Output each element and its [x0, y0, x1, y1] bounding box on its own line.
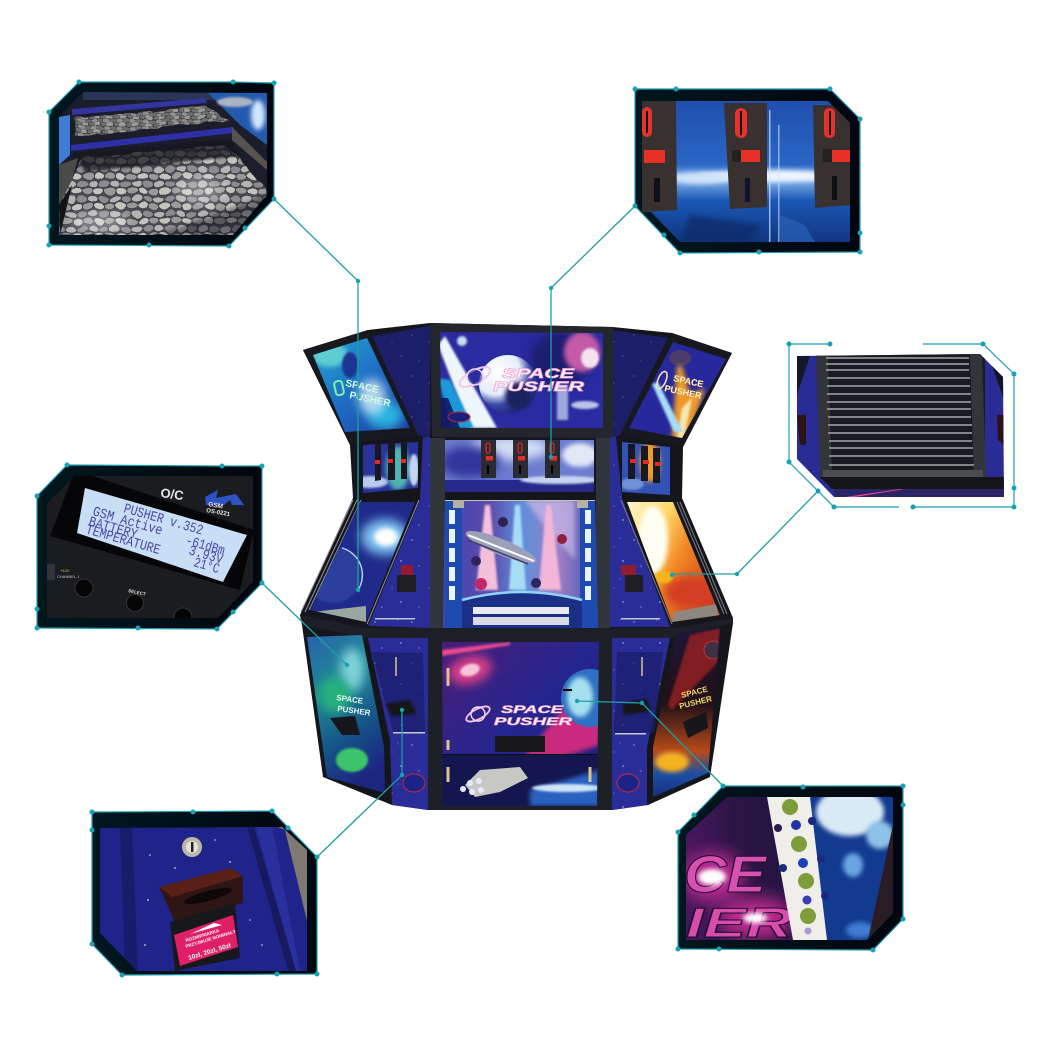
callout: bill slot photo	[92, 811, 317, 975]
callout: louvered vent photo	[789, 344, 1014, 507]
frame	[678, 786, 903, 950]
left wing art: SPACE	[344, 378, 380, 396]
photo	[640, 100, 852, 243]
coin slots on blue columns	[375, 565, 660, 620]
ticket strip	[767, 797, 827, 940]
photo: +12V	[60, 568, 70, 573]
connector: bill slot	[317, 710, 402, 857]
top right blue side panel	[613, 330, 668, 438]
LCD text: 3.93V	[187, 543, 225, 569]
frame	[635, 89, 860, 253]
middle dark band	[300, 615, 733, 638]
connector: LCD	[262, 583, 347, 665]
lower right graphic panel: PUSHER	[678, 694, 713, 711]
callout: coin acceptors photo	[635, 89, 860, 253]
right blue column	[610, 437, 670, 627]
connector: coin playfield	[274, 199, 358, 590]
photo	[98, 826, 310, 972]
LCD text: BATTERY	[87, 514, 140, 544]
centre coin acceptor panel	[445, 440, 594, 492]
callout: coin playfield photo	[49, 82, 274, 246]
lower left graphic panel	[307, 635, 385, 793]
connector lines and dots	[262, 199, 818, 857]
right wing art: PUSHER	[664, 383, 703, 401]
lower centre frame	[428, 638, 612, 810]
LCD text	[88, 503, 224, 572]
LCD text: PUSHER v.352	[122, 501, 205, 539]
left blue column	[368, 437, 430, 628]
LCD text: -61dBm	[184, 533, 226, 560]
lower centre door art	[442, 642, 599, 806]
photo: CHANNEL 1	[57, 574, 80, 579]
centre coin acceptors	[481, 440, 560, 478]
right wing art: SPACE	[673, 373, 704, 389]
photo: IER	[686, 899, 793, 946]
callout corner dots	[34, 80, 1016, 978]
photo: CE	[684, 846, 767, 904]
lower left graphic panel: PUSHER	[337, 704, 371, 718]
LCD text: 21°C	[192, 555, 221, 578]
left glass frame rails	[301, 500, 419, 624]
door logo	[464, 703, 572, 728]
marquee logo: SPACE	[502, 365, 575, 381]
door logo: SPACE	[501, 704, 564, 716]
pink label	[174, 915, 238, 966]
marquee logo: PUSHER	[493, 378, 585, 394]
lower right blue panel	[612, 638, 670, 810]
centre pillars	[430, 438, 610, 630]
lower right door and slot	[614, 652, 663, 792]
photo: 10zł, 20zł, 50zł	[188, 942, 232, 962]
photo	[55, 90, 270, 240]
photo: ROZMIENIARKA	[185, 928, 220, 943]
LCD text: TEMPERATURE	[84, 522, 162, 559]
lower right graphic panel: SPACE	[680, 685, 709, 700]
top centre marquee art	[438, 332, 604, 429]
left glass playfield	[310, 502, 415, 622]
photo: OS-0221	[206, 508, 231, 518]
broken outline	[789, 344, 1014, 507]
photo: GSM	[208, 501, 223, 511]
spaceship	[466, 531, 536, 563]
lower left blue panel	[368, 638, 428, 810]
right acceptor panel	[620, 441, 671, 496]
left wing art: PUSHER	[348, 390, 392, 410]
left acceptor panel	[363, 442, 418, 493]
photo	[686, 797, 893, 940]
marquee logo	[457, 363, 585, 394]
photo: SELECT	[128, 588, 146, 597]
callout: ticket strip photo	[678, 786, 903, 950]
right glass playfield	[627, 502, 720, 622]
top centre marquee frame	[430, 323, 613, 438]
lower left graphic panel: SPACE	[336, 693, 364, 706]
photo	[47, 476, 253, 618]
photo: O/C	[160, 485, 185, 503]
left wing frame	[303, 330, 418, 445]
left wing art	[313, 338, 410, 432]
top left blue side panel	[372, 326, 430, 438]
small black mark	[563, 689, 572, 691]
photo	[795, 352, 1007, 500]
connector: tickets	[577, 701, 723, 786]
lower left door and slot	[372, 652, 425, 792]
right wing art	[629, 342, 726, 438]
frame	[92, 811, 317, 975]
connector: coin acceptor	[551, 206, 635, 457]
connector: vent	[672, 491, 818, 574]
photo: PRZYJMUJE NOMINAŁY	[185, 929, 236, 949]
lower right graphic panel	[653, 628, 720, 797]
frame	[37, 465, 262, 629]
callout: LCD controller photo	[37, 465, 262, 629]
right wing frame	[620, 333, 732, 447]
LCD screen	[77, 488, 247, 582]
arcade machine: Space Pusher	[300, 323, 733, 810]
right glass frame rails	[621, 500, 727, 624]
door logo: PUSHER	[494, 716, 572, 728]
centre glass playfield	[443, 498, 599, 630]
machine base silhouette	[300, 323, 733, 810]
frame	[49, 82, 274, 246]
LCD text: GSM Active	[91, 504, 164, 540]
